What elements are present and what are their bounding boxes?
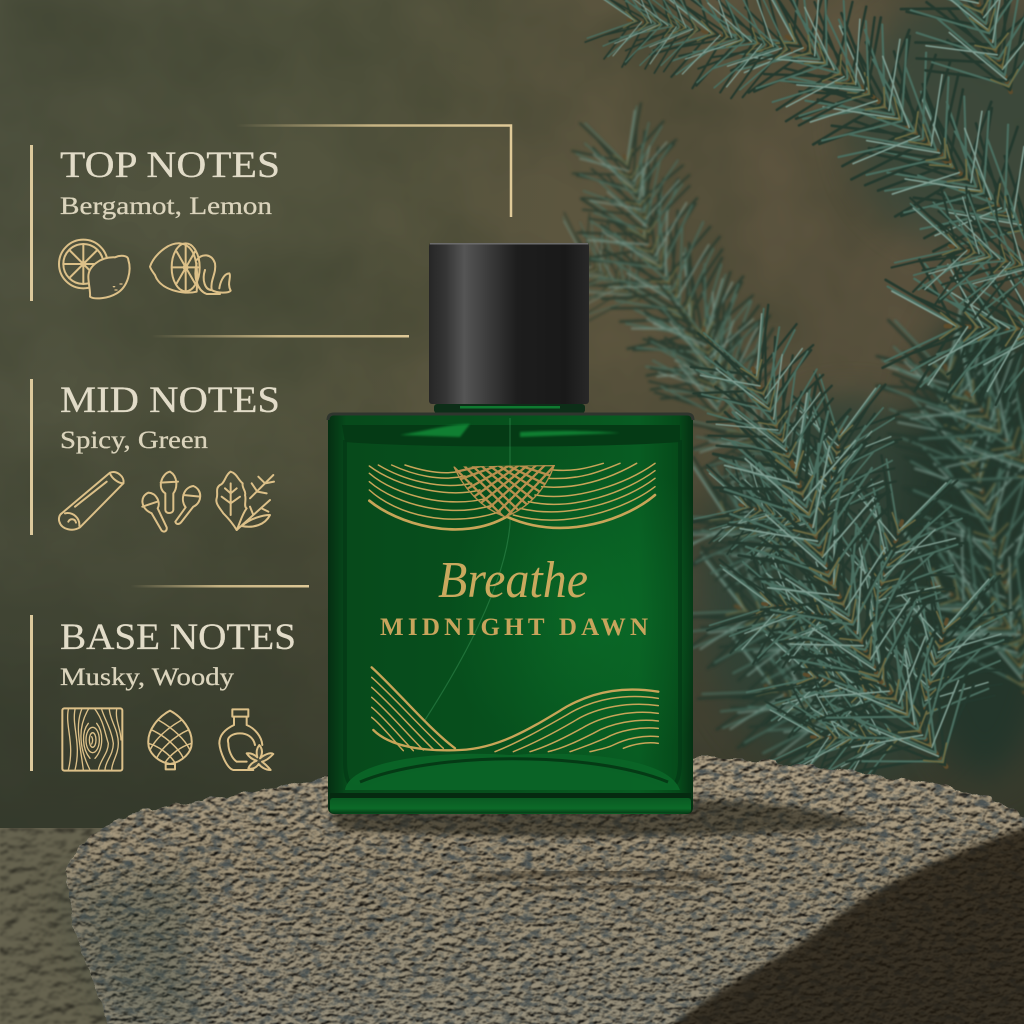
mid subtitle: Spicy, Green	[60, 427, 209, 454]
top accent bar	[30, 145, 33, 301]
divider: mid to base	[130, 585, 309, 588]
top bracket line	[235, 126, 511, 217]
base accent bar	[30, 615, 33, 771]
bottle shadow	[330, 800, 870, 836]
icon: bergamot and lemon	[59, 240, 130, 298]
mid heading: MID NOTES	[60, 380, 280, 421]
icon: wood grain	[62, 708, 122, 771]
bottle cap	[429, 243, 589, 404]
bottle neck	[434, 404, 585, 413]
gold mesh	[454, 465, 555, 518]
panel: top notes	[30, 126, 511, 301]
top subtitle: Bergamot, Lemon	[60, 193, 273, 220]
product name: MIDNIGHT DAWN	[380, 614, 648, 641]
soft foliage mass	[700, 0, 1024, 780]
pine branches	[520, 0, 1024, 813]
brand script: Breathe	[438, 552, 588, 609]
in focus branches	[582, 0, 1024, 813]
gold bottom wave pattern	[372, 667, 658, 752]
icon: cinnamon	[59, 472, 124, 530]
icon: cloves	[142, 472, 200, 532]
rock shadow	[668, 826, 1024, 1024]
panel: base notes	[30, 615, 296, 771]
base subtitle: Musky, Woody	[60, 664, 235, 691]
divider: top to mid	[150, 335, 409, 338]
gold top wave pattern	[369, 463, 655, 529]
glass body	[328, 414, 693, 814]
out of focus twigs	[520, 96, 1024, 794]
base heading: BASE NOTES	[60, 617, 296, 658]
icon: lemon and peel	[150, 243, 231, 294]
perfume bottle	[328, 243, 693, 814]
panel: mid notes	[30, 379, 280, 535]
ground surface	[0, 828, 200, 1024]
mid accent bar	[30, 379, 33, 535]
top heading: TOP NOTES	[60, 145, 280, 186]
icon: pine cone	[148, 711, 192, 769]
icon: leaves	[216, 472, 274, 530]
rock	[66, 757, 1024, 1024]
icon: oil bottle with flower	[219, 709, 273, 770]
